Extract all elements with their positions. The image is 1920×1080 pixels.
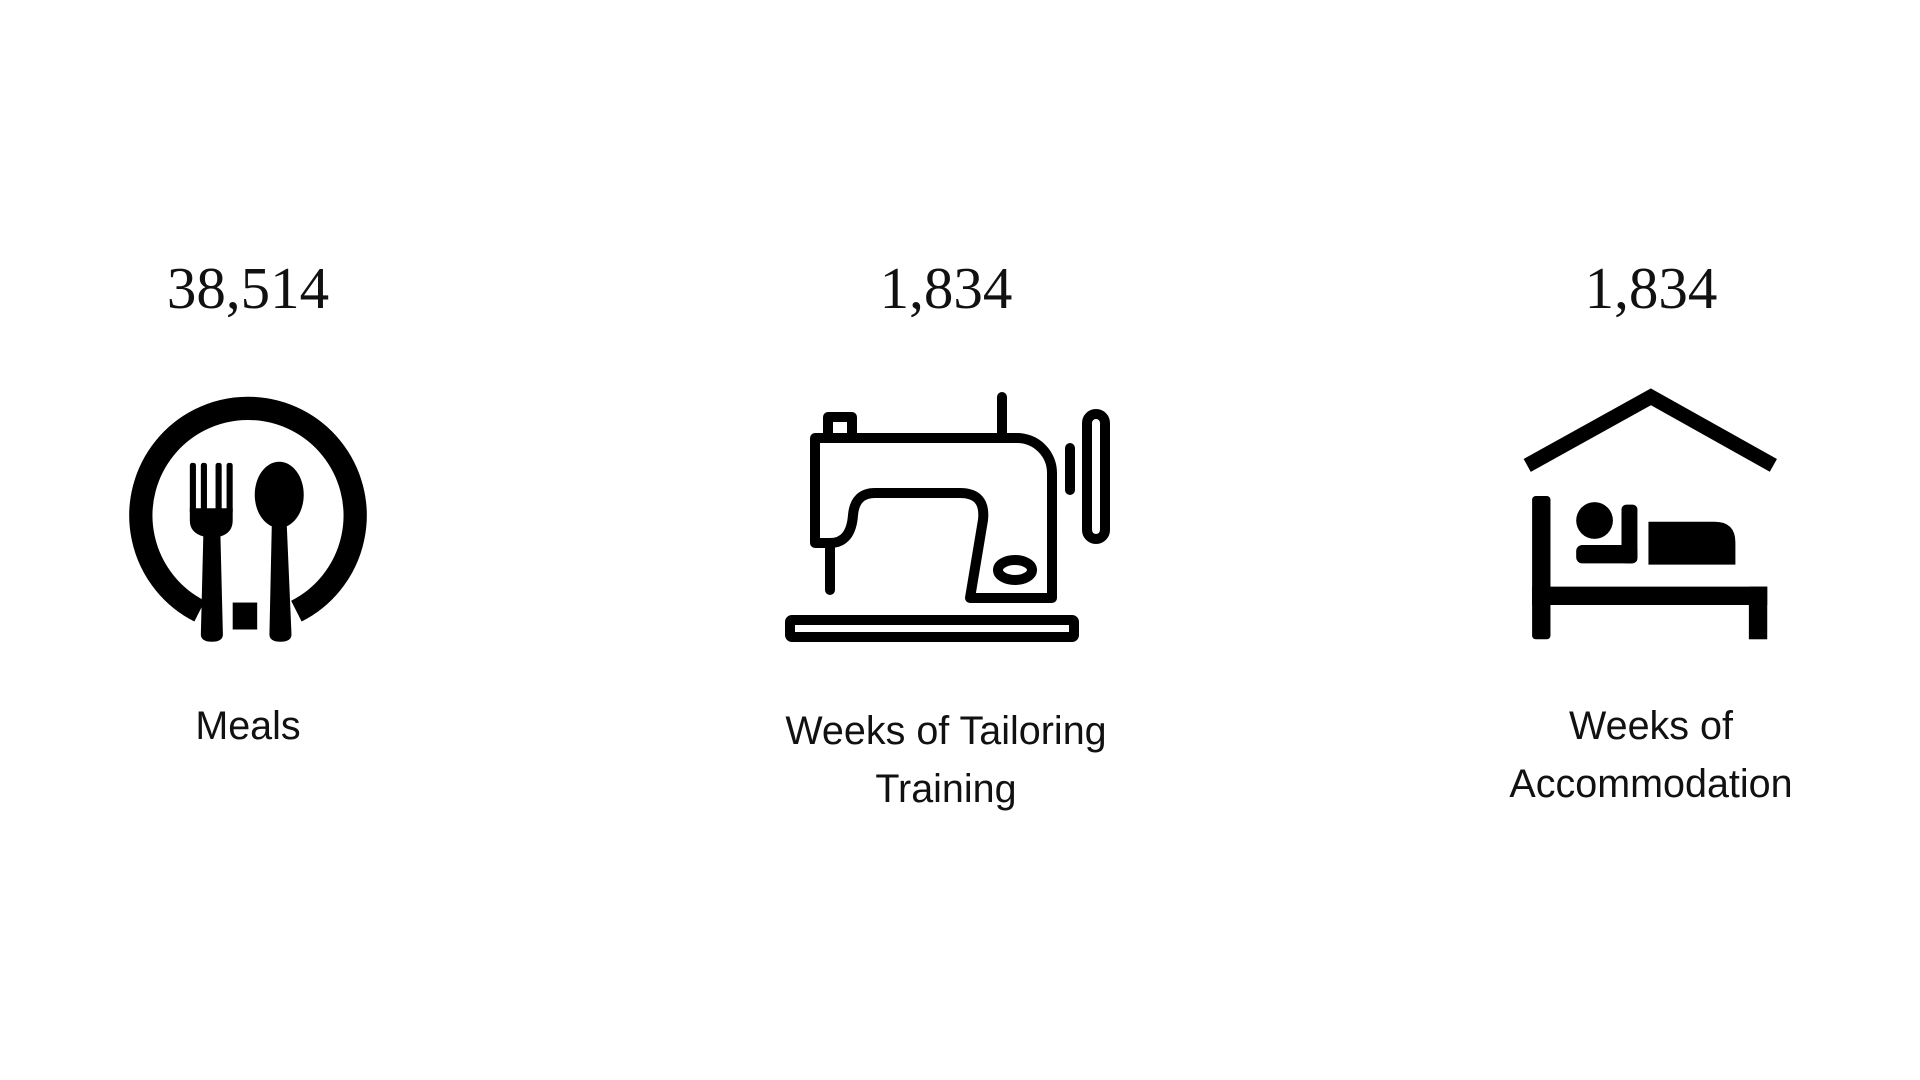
icon: plate with fork and spoon (141, 408, 355, 642)
label: accommodation: Weeks of (1569, 704, 1733, 748)
number: meals: 38,514 (167, 255, 329, 321)
label: accommodation: Accommodation (1509, 762, 1793, 806)
label: tailoring: Training (875, 767, 1017, 811)
label: tailoring: Weeks of Tailoring (785, 709, 1107, 753)
label: tailoring (785, 709, 1107, 811)
label: meals: Meals (195, 704, 301, 748)
number: accommodation: 1,834 (1585, 255, 1717, 321)
number: tailoring: 1,834 (880, 255, 1012, 321)
icon: bed under roof (1527, 397, 1773, 639)
label: accommodation (1509, 704, 1793, 806)
icon: sewing machine (790, 397, 1105, 637)
